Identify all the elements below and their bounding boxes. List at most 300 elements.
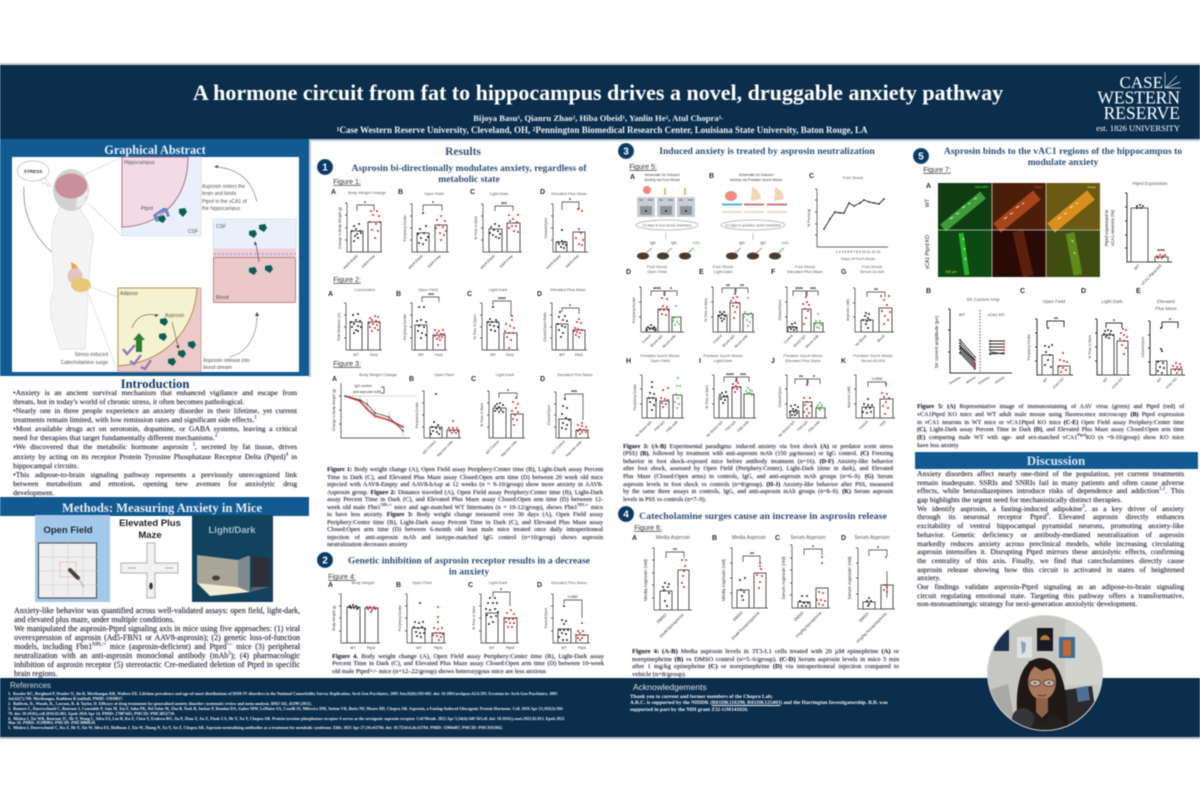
schematic: foot shock paradigm: 10 days in foot shock chambers [642,224,692,228]
text block: methods: We manipulated the asprosin-Ptprd signaling axis in mice using five approaches: (1) viral [14,624,300,633]
panel: elevated plus maze [119,518,181,598]
chart: fig 4C light dark: % Time in Dark [472,606,476,630]
caption: figure 7: have less anxiety [917,443,959,449]
micrograph panel A: A [926,183,931,190]
text block: discussion: markedly reduces anxiety across preclinical models, while increasing circulating [917,538,1184,548]
chart: SK current amplitude [926,288,1012,385]
panel: graphical abstract background [0,139,309,376]
heading: results: Results [445,146,481,158]
references list: 1. Kessler RC, Berglund P, Demler O, Jin R, Merikangas KR, Walters EE. Lifetime prevalence and age-of-onset distributions of DSM-IV disorders in the National Comorbidity Survey Replication. Arch Gen Psychiatry. 2005 Jun;62(6):593-602. doi: 10.1001/archpsyc.62.6.593. Erratum in: Arch Gen Psychiatry. 2005 Jul;62(7):768. Merikangas, Kathleen R [added]. PMID: 15939837. [8,691,557,701]
caption: figure 7: in vCA1 neurons in WT mice or vCA1Ptprd KO mice (C-E) Open Field assay Periphery:Center time [917,420,1184,426]
chart: fig 7C open field [1020,288,1073,390]
chart: fig 5J predator scent elevated plus maze [771,353,827,438]
chart: fig 1B open field: * [432,201,434,207]
chart: fig 5I predator scent light dark: % Time in Dark [705,385,709,409]
top border of poster [0,63,1200,65]
caption: figure 6: vehicle (n=8/group). [632,671,686,678]
chart: fig 3B open field: Open Field [434,372,454,377]
chart: fig 2A locomotion: Fbn1 [370,353,378,357]
chart: fig 5D foot shock open field: Periphery:Center [632,296,636,323]
chart: fig 4A body weight: A [328,582,333,589]
label: asprosin enters brain: Ptprd in the vCA1 of [202,199,247,205]
chart: fig 3B open field: IgG Control [422,440,437,455]
adipose inset: Asprosin [165,313,185,319]
hippocampus inset: Hippocampus [124,160,155,166]
chart: fig 4D elevated plus maze: WT [561,646,568,650]
chart: fig 2D elevated plus maze: Closed:Open Ratio [543,312,547,342]
micrograph panel A [925,183,1100,277]
chart: fig 2C light dark: **** [498,297,506,303]
heading: acknowledgements: Acknowledgements [633,682,707,692]
chart: fig 2D elevated plus maze [537,287,587,357]
chart: fig 1B open field [398,189,449,270]
chart: fig 6A media asprosin: 20uM Epinephrine [658,612,685,639]
chart: fig 7D light dark: D [1081,288,1086,295]
left column divider [309,139,310,377]
chart: fig 4A body weight: Body Weight (g) [332,605,336,631]
text block: discussion: We identify asprosin, a fasting-induced adipokine3, as a key driver of anxiety [917,504,1184,513]
schematic: foot shock paradigm: mAb [692,241,700,245]
chart: fig 2B open field: Fbn1 [435,353,443,357]
text block: introduction [12,388,298,498]
chart: fig 3C light dark: C [471,376,476,383]
authors: 1 [517,115,520,121]
chart: fig 4A body weight [328,580,380,650]
chart: fig 5E foot shock light dark: Foot Shock [713,264,733,269]
text block: discussion: Our findings validate asprosin-Ptprd signaling as an adipose-to-brain signaling [917,582,1184,591]
text block: introduction: •Anxiety is an ancient survival mechanism that enhanced vigilance and escape from [13,388,297,397]
text block: discussion: gap highlights the urgent need for mechanistically distinct therapies. [917,495,1122,504]
chart: fig 5D foot shock open field: Foot Shock [647,264,667,269]
csf and blood inset: Blood [216,295,229,301]
chart: fig 7E elevated plus maze: vCA1 KO [1165,377,1178,390]
chart: fig 5K predator scent serum: Asprosin (nM) [847,386,851,408]
chart: fig 6C serum asprosin: DMSO [793,610,805,622]
label: figure 5: Figure 5: [629,164,657,171]
chart: fig 2C light dark [467,287,519,357]
caption: figures 1 to 3: assay Percent Time in Dark (C), and Elevated Plus Maze assay Closed:Open arm time (D) between 12- [327,496,603,503]
chart: fig 1D elevated plus maze: AAV8-hAsp [565,254,580,269]
chart: fig 2B open field: Periphery:Center [403,313,407,340]
university logo: WESTERN [1097,88,1180,108]
chart: fig 3D elevated plus maze: IgG Control [551,440,566,455]
text block: discussion [916,469,1185,608]
chart: fig 1C light dark: AAV8-hAsp [499,254,514,269]
chart: fig 3A body weight line chart: Change in Body Weight (g) [332,389,336,431]
chart: SK current amplitude: SK current amplitude (pA) [934,315,939,368]
acknowledgements text: Thank you to current and former members of the Chopra Lab; [630,694,773,700]
methods heading bar [0,497,309,516]
chart: fig 1C light dark: AAV8-Empty [479,254,496,270]
label: asprosin enters brain [202,184,247,212]
chart: fig 1B open field: Periphery:Center [403,214,407,241]
label: figure 1: Figure 1: [333,179,361,186]
label: figure 3: Figure 3: [333,361,361,368]
chart: SK current amplitude: apamin [994,375,1006,384]
chart: fig 5H predator scent open field: PSS-IgG [653,420,666,432]
chart: fig 5C freezing line [807,173,888,261]
caption: figure 5 [622,443,894,503]
schematic: predator scent stress paradigm [709,173,789,260]
authors: 1 [622,115,625,121]
chart: SK current amplitude: B [926,288,931,295]
chart: fig 4D elevated plus maze [537,580,590,650]
chart: fig 5I predator scent light dark: *** [740,373,746,379]
label: figure 7: Figure 7: [923,167,951,174]
chart: fig 6C serum asprosin: * [812,545,814,551]
badge 2: 2 [322,556,328,566]
chart: fig 5D foot shock open field: Shock-mAb [661,334,677,349]
text block: introduction: threats, but in today's world of chronic stress, it often becomes pathological. [13,397,244,406]
chart: fig 4A body weight: Ptprd [367,646,375,650]
micrograph panel A: Ptprd [1035,185,1042,189]
chart: fig 1D elevated plus maze: * [569,198,571,204]
text block: discussion: the centrality of this axis. Finally, we find that catecholamines directly cause [917,556,1184,565]
chart: fig 5D foot shock open field [626,264,684,349]
chart: fig 5J predator scent elevated plus maze: PSS-mAb [807,420,821,433]
chart: fig 5F foot shock elevated plus maze: F [771,269,776,276]
caption: figure 5: behavior in foot shock–exposed mice before antibody treatment (n=16). (D-F) Anxiety-like behavior [623,459,893,465]
chart: fig 6A media asprosin [632,535,692,639]
caption: figure 6: after 1 mg/kg epinephrine (C) or norepinephrine (D) via intraperitoneal injection compared to [632,663,899,670]
chart: fig 2C light dark: C [467,291,472,298]
text block: methods: and elevated plus maze, under multiple conditions. [14,615,174,624]
chart: ptprd expression: Ptprd expressed in [1104,209,1109,246]
chart: ptprd expression: vCA1 Ptprd KO [1140,263,1163,286]
chart: fig 2C light dark: Light-Dark [489,287,507,292]
caption: figures 1 to 3: to have less anxiety. Figure 3: Body weight change measured over 30 days (A), Open Field assay [327,511,603,518]
text block: introduction: •This adipose-to-brain signaling pathway represents a previously unrecognized link [13,470,297,479]
micrograph panel A: vCA1 Ptprd KO [925,235,931,269]
label: catecholamine surge: Catecholamine surge [61,360,108,366]
chart: fig 7C open field: WT [1042,377,1049,383]
badge 5: 5 [918,152,924,162]
chart: fig 2B open field: *** [428,293,434,299]
panel: open field assay: Open Field [43,525,93,536]
arrow: stress to body [24,187,63,261]
chart: fig 1C light dark: C [470,189,475,196]
chart: fig 6A media asprosin: DMSO [656,612,668,624]
chart: fig 5D foot shock open field: **** [653,287,661,293]
chart: fig 1D elevated plus maze: D [540,189,545,196]
chart: fig 3C light dark: * [507,389,509,395]
chart: fig 5I predator scent light dark: I [699,358,701,365]
chart: fig 1D elevated plus maze [540,189,588,270]
chart: fig 7E elevated plus maze: E [1136,288,1141,295]
chart: fig 1D elevated plus maze: Closed:Open [544,218,548,238]
heading: section 5: Asprosin binds to the vAC1 regions of the hippocampus to [944,146,1182,157]
schematic: predator scent stress paradigm: IgG [739,241,745,245]
schematic: predator scent stress paradigm: IgG [760,241,766,245]
chart: fig 2A locomotion: WT [353,353,360,357]
text block: introduction: need for therapies that target fundamentally different mechanisms.2 [13,433,217,442]
label: asprosin enters brain: brain and binds [202,191,237,197]
text block: introduction: •Nearly one in three people experience an anxiety disorder in their lifetime, yet current [13,406,297,415]
chart: fig 5G foot shock serum [841,264,894,347]
chart: fig 5K predator scent serum: PSS [879,419,887,428]
chart: fig 2A locomotion [328,287,382,357]
text block: discussion: effects, while benzodiazepines introduce risks of dependence and addiction1,2. This [917,486,1184,495]
panel: open field assay [35,515,110,602]
chart: fig 5E foot shock light dark: Shock-mAb [733,334,749,349]
caption: figures 1 to 3: injection of anti-asprosin mAb and isotype-matched IgG control (n=10/group) shows asprosin [327,534,603,540]
chart: fig 7D light dark: Light Dark [1102,299,1123,304]
chart: fig 3A body weight line chart [332,372,417,438]
badge 5 [913,148,929,164]
chart: fig 2B open field: B [396,291,401,298]
chart: fig 5I predator scent light dark: PSS-IgG [724,420,737,432]
schematic: foot shock paradigm: IgG [671,241,677,245]
icon: stress thought bubble: STRESS [24,169,42,174]
chart: fig 5D foot shock open field: * [670,287,672,293]
chart: fig 5J predator scent elevated plus maze: J [771,358,775,365]
caption: figures 1 to 3: Closed:Open arm time (D) between 6-month old lean male mice treated once daily intraperitoneal [327,526,603,533]
bottom border of poster [0,737,1200,738]
panel: graphical abstract [17,143,296,372]
micrograph panel A: AAV-GFP [975,185,988,189]
chart: fig 2D elevated plus maze: Fbn1 [575,353,583,357]
caption: figure 5: (PSS) (B), followed by treatment with anti-asprosin mAb (150 µg/mouse) or IgG control. (C) Freezing [623,451,893,457]
caption: figure 7 [916,403,1185,450]
authors: , Hiba Obeid [575,113,622,123]
chart: SK current amplitude: vCA1 KO [988,312,1004,317]
authors: 1, [719,115,723,121]
caption: figure 7: (E) comparing male WT with age- and sex-matched vCA1Ptprd KO (n =9-10/group) show KO mice [917,432,1184,441]
chart: fig 2D elevated plus maze: * [569,304,571,310]
chart: fig 5G foot shock serum: Serum ELISA [860,269,884,274]
chart: fig 6C serum asprosin: C [775,535,780,542]
caption: figure 5: by the same three assays in controls, IgG, and anti-asprosin mAb groups (n=8–9). (K) Serum asprosin [623,489,893,495]
text block: introduction: •We discovered that the metabolic hormone asprosin 3, secreted by fat tissue, drives [13,442,297,451]
chart: fig 5H predator scent open field: PSS-mAb [665,420,679,433]
chart: fig 5E foot shock light dark: ** [726,284,730,290]
chart: fig 6B media asprosin: B [712,535,717,542]
caption: figures 1 to 3: injected with AAV8-Empty and AAV8-hAsp at 12 weeks (n = 9-10/group) show more anxiety in AAV8- [327,481,603,488]
badge 1: 1 [322,162,328,174]
text block: methods: overexpression of asprosin (Ad5-FBN1 or AAV8-asprosin); (2) genetic loss-of-function [14,633,300,642]
chart: ptprd expression [1104,181,1172,286]
chart: fig 6D serum asprosin: Serum Asprosin (nM) [847,556,852,600]
chart: fig 7C open field: ** [1054,317,1058,323]
chart: fig 1D elevated plus maze: Elevated Plus Maze [551,191,587,196]
authors: , Qianru Zhao [520,113,572,123]
label: catecholamine surge: Stress-induced [75,352,108,358]
chart: fig 6B media asprosin: DMSO [732,610,744,622]
caption: figure 4 [332,653,605,676]
chart: fig 4C light dark: Ptprd [506,646,514,650]
schematic: foot shock paradigm: Schematic for Induced [645,173,679,177]
chart: fig 6D serum asprosin: * [877,546,879,552]
chart: fig 5H predator scent open field: Predator Scent Stress [640,353,680,358]
arrow: to hippocampus [214,165,257,202]
chart: fig 5F foot shock elevated plus maze: Shock-mAb [804,334,820,349]
chart: fig 4B open field: WT [416,646,423,650]
header band [0,65,1200,139]
affiliations: 2 [533,127,536,133]
references list: 2. Baldwin, D., Woods, R., Lawson, R. & Taylor, D. Efficacy of drug treatments for generalised anxiety disorder: systematic review and meta-analysis. BMJ 342, d1199 (2011). [8,701,312,706]
photo: presenter [985,615,1105,733]
chart: fig 1C light dark: % Time in Dark [474,216,478,240]
chart: fig 2B open field: Open Field [418,287,438,292]
text block: introduction: development. [13,488,54,497]
chart: fig 6C serum asprosin: Serum Asprosin (nM) [781,556,786,600]
chart: fig 6A media asprosin: Media Asprosin [656,535,690,541]
chart: fig 5H predator scent open field: Periphery:Center [633,383,637,410]
chart: fig 6B media asprosin [712,535,768,641]
caption: figure 6 [632,648,900,678]
chart: fig 5I predator scent light dark [699,353,756,438]
chart: fig 7D light dark: * [1113,319,1115,325]
chart: fig 6D serum asprosin [841,535,895,644]
chart: fig 5K predator scent serum: 0.0555 [872,377,882,381]
chart: SK current amplitude: WT [959,312,966,317]
caption: figure 7: vCA1Ptprd KO mice and WT adult male mouse using fluorescence microscopy (B) Ptprd expression [917,412,1184,418]
heading: section 2: Genetic inhibition of asprosin receptor results in a decrease [348,556,591,566]
chart: fig 2A locomotion: A [328,291,333,298]
caption: figure 5: Figure 3: (A-B) Experimental paradigms: induced anxiety via foot shock (A) or predator scent stress [623,444,893,450]
chart: fig 1B open field: Open Field [424,191,444,196]
heading: methods: Methods: Measuring Anxiety in Mice [62,501,262,515]
chart: fig 5E foot shock light dark: Shock-IgG [722,334,736,348]
chart: fig 5H predator scent open field [626,353,684,438]
adipose inset: Adipose [120,291,138,297]
caption: figure 6: norepinephrine (B) vs DMSO control (n=5–6/group). (C-D) Serum asprosin levels in mice 5 min [632,656,899,663]
label: asprosin release [203,358,250,371]
chart: fig 5H predator scent open field: No Stress-IgG [635,420,653,438]
chart: fig 5J predator scent elevated plus maze: PSS-IgG [796,420,809,432]
chart: fig 6C serum asprosin: Serum Asprosin [790,535,826,541]
chart: fig 2D elevated plus maze: WT [559,353,566,357]
caption: figure 5: Plus Maze (Closed:Open arms) in controls, IgG, and anti-asprosin mAb groups (n=6–9). (G) Serum [623,474,893,480]
human body figure [50,169,93,349]
chart: fig 1B open field: B [398,189,403,196]
chart: fig 6C serum asprosin [775,535,830,639]
chart: fig 3B open field: Periphery:Center [415,401,419,428]
chart: fig 7D light dark [1081,288,1130,390]
csf and blood inset: CSF [216,224,226,230]
chart: fig 5E foot shock light dark: Control [712,334,723,344]
references list: 3. Romere C, Duerrschmid C, Bournat J, Constable P, Jain M, Xia F, Saha PK, Del Solar M, Zhu B, York B, Sarkar P, Rendon DA, Gaber MW, LeMaire SA, Coselli JS, Milewicz DM, Sutton VR, Butte NF, Moore DD, Chopra AR. Asprosin, a Fasting-Induced Glucogenic Protein Hormone. Cell. 2016 Apr 21;165(3):566-79. doi: 10.1016/j.cell.2016.02.063. Epub 2016 Apr 14. PMID: 27087445; PMCID: PMC4852710. [8,706,564,716]
text block: discussion: asprosin intensifies it. Disrupting Ptprd mirrors these anxiolytic effects, confirming [917,547,1184,556]
panel: light dark assay: Light/Dark [209,525,256,536]
chart: fig 6B media asprosin: Media Asprosin [732,535,766,541]
schematic: predator scent stress paradigm: B [709,173,714,180]
chart: fig 3A body weight line chart: Body Weight Change [359,372,398,377]
heading: section 5 [944,146,1182,168]
chart: fig 6A media asprosin: A [632,535,637,542]
graphical abstract white card [12,157,299,372]
chart: fig 3B open field [409,372,461,458]
text block: methods: brain regions. [14,669,57,678]
chart: fig 1B open field: AAV8-Empty [407,254,424,270]
badge 3: 3 [623,146,629,158]
chart: fig 2C light dark: Fbn1 [506,353,514,357]
badge 1 [317,159,333,175]
chart: fig 5I predator scent light dark: Predator Scent Stress [703,353,743,358]
authors: , Atul Chopra [668,113,719,123]
heading: section 2 [348,556,591,578]
text block: methods: inhibition of asprosin receptor (5) stereotactic Cre-mediated deletion of Ptprd in specific [14,660,300,669]
chart: fig 5E foot shock light dark: E [699,269,704,276]
chart: fig 1A body weight change [331,189,387,270]
chart: fig 5I predator scent light dark: No Stress-IgG [706,420,724,438]
chart: fig 5I predator scent light dark: Light-Dark [714,358,732,363]
text block: introduction: treatments remain limited, with low remission rates and significant side effects.1 [13,415,257,424]
caption: figure 7: (C), Light-Dark assay Percent Time in Dark (D), and Elevated Plus Maze assay Closed:Open arm time [917,427,1184,433]
text block: introduction: between metabolism and emotion, opening new avenues for anxiolytic drug [13,479,297,488]
chart: fig 5G foot shock serum: ** [874,288,878,294]
chart: fig 5E foot shock light dark: Light-Dark [714,269,732,274]
text block: methods: Anxiety-like behavior was quantified across well-validated assays: open field, light-dark, [14,606,300,615]
chart: fig 5H predator scent open field: Open Field [650,358,670,363]
chart: ptprd expression: WT [1133,263,1141,271]
label: asprosin release: blood stream [203,365,232,371]
text block: discussion: anxiety. [917,573,940,582]
caption: figure 5: after foot shock, assessed by Open Field (Periphery:Center), Light-Dark (time in dark), and Elevated [623,466,893,472]
chart: fig 5C freezing line: 1 2 3 4 5 6 7 8 9 10 11 12 13 [836,250,880,254]
chart: fig 4C light dark: C [468,582,473,589]
icon: stress thought bubble [17,161,50,186]
text block: methods: neutralization with an anti-asprosin monoclonal antibody (mAb5); (4) pharmacologic [14,650,300,660]
references list: 5. Mishra I, Duerrschmid C, Ku Z, He Y, Xie W, Silva ES, Hoffman J, Xin W, Zhang N, Xu Y, An Z, Chopra AR. Asprosin-neutralizing antibodies as a treatment for metabolic syndrome. Elife. 2021 Apr 27;10:e63784. doi: 10.7554/eLife.63784. PMID: 33904407; PMCID: PMC8102062. [8,725,503,730]
chart: fig 7D light dark: vCA1 KO [1111,377,1124,390]
heading: section 5: modulate anxiety [1028,157,1099,168]
text block: introduction: hippocampal circuits. [13,461,78,470]
caption: figure 4: old male Ptprd+/- mice (n=12–22/group) shows heterozygous mice are less anxious [332,668,546,675]
affiliations: Pennington Biomedical Research Center, Louisiana State University, Baton Rouge, LA [536,125,868,135]
chart: fig 7D light dark: % Time in Dark [1088,335,1092,359]
hippocampus inset: CSF [188,229,198,235]
chart: ptprd expression: Ptprd Expression [1133,181,1168,186]
chart: SK current amplitude: apamin [965,375,977,384]
schematic: predator scent stress paradigm: mAb [781,241,789,245]
chart: fig 4D elevated plus maze: D [537,582,542,589]
text block: discussion: asprosin release showing how this circuit is activated in states of heightened [917,565,1184,574]
text block: introduction: anxiety by acting on its receptor Protein Tyrosine Phosphatase Receptor Delta (Ptprd)4 in [13,452,297,461]
micrograph panel A: Merge [1087,185,1096,189]
column divider [309,139,1200,140]
micrograph panel A: WT [925,198,931,207]
chart: SK current amplitude: baseline [949,375,962,385]
chart: fig 5F foot shock elevated plus maze: Control [783,334,794,344]
chart: fig 5K predator scent serum: K [841,358,846,365]
chart: fig 7E elevated plus maze: * [1169,318,1171,324]
badge 4 [618,506,634,522]
affiliations: Case Western Reserve University, Cleveland, OH, [339,125,533,135]
heading: graphical abstract: Graphical Abstract [104,143,207,157]
chart: fig 5I predator scent light dark: PSS-mAb [736,420,750,433]
chart: fig 5F foot shock elevated plus maze: Shock-IgG [793,334,807,348]
schematic: predator scent stress paradigm: Anxiety via Predator Scent Stress [730,178,782,182]
chart: fig 3D elevated plus maze: D [540,376,545,383]
heading: section 1: metabolic state [438,174,501,185]
text block: methods [14,606,301,679]
chart: fig 4A body weight: WT [350,646,357,650]
chart: fig 5D foot shock open field: Open Field [647,269,667,274]
text block: discussion: excitability of ventral hippocampal pyramidal neurons, promoting anxiety-like [917,521,1184,530]
csf and blood inset [213,219,296,302]
chart: fig 7D light dark: WT [1102,377,1109,383]
badge 2 [317,552,333,568]
chart: fig 5G foot shock serum: No Shock [854,334,868,347]
schematic: predator scent stress paradigm: 10 days in predator scent chambers [725,224,781,228]
chart: fig 3D elevated plus maze: Elevated Plus Maze [557,372,593,377]
chart: fig 1A body weight change: A [331,189,336,196]
label: asprosin release: Asprosin release into [203,358,250,364]
authors: 2 [572,115,575,121]
chart: fig 5F foot shock elevated plus maze: Closed:Open [778,300,782,320]
chart: fig 2A locomotion: Locomotion [355,287,375,292]
